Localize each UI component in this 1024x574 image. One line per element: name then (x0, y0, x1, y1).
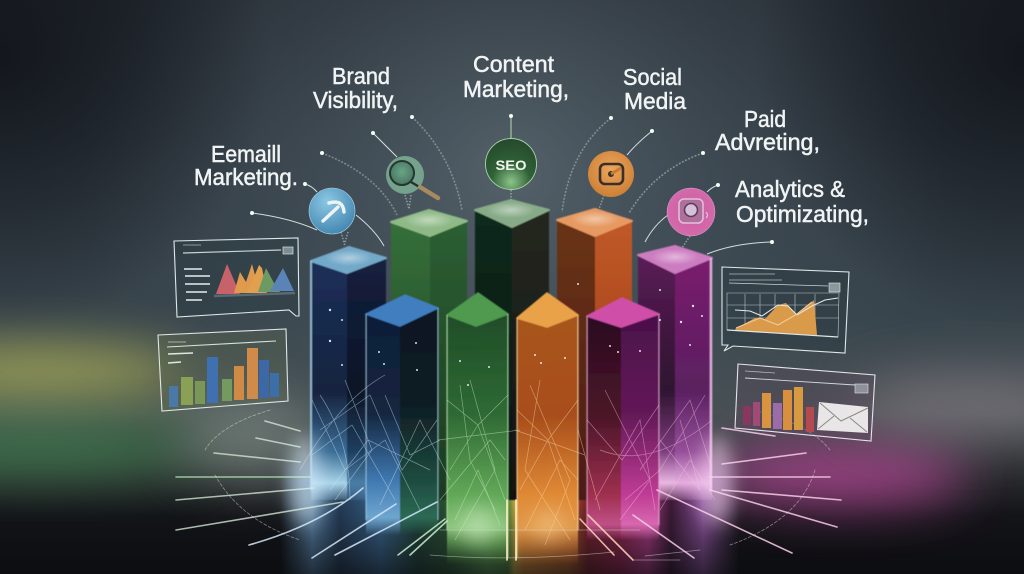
label: Brand Visibility: Brand (332, 63, 390, 89)
label: Content Marketing: Marketing, (463, 76, 569, 102)
glow at column bases (289, 435, 733, 543)
floor light lines (176, 410, 841, 560)
chart panel: area chart left (174, 238, 299, 317)
label: Paid Advertising: Paid (744, 106, 786, 132)
chart panel: bar chart left (158, 329, 288, 411)
label: Social Media (623, 64, 686, 114)
leader lines (250, 114, 774, 254)
icon: email arrow (309, 188, 355, 234)
label: Brand Visibility: Visibility, (313, 87, 398, 113)
icon: social media play (588, 151, 634, 197)
icon: SEO badge: SEO (496, 157, 527, 173)
icon: camera (667, 188, 715, 236)
label: Analytics and Optimizing: Optimizating, (736, 201, 869, 227)
label: Analytics and Optimizing (735, 176, 869, 227)
label: Email Marketing: Eemaill (211, 141, 281, 167)
label: Content Marketing: Content (473, 51, 555, 77)
column: back dark green (475, 200, 549, 500)
column: back blue (311, 247, 386, 500)
column: front orange (517, 293, 578, 565)
chart panel: line and area chart right (722, 267, 849, 353)
column: front green (447, 293, 508, 565)
label: Social Media: Media (624, 88, 686, 114)
icon: magnifier (386, 156, 438, 198)
label: Paid Advertising: Advreting, (715, 129, 820, 155)
column: back orange (557, 209, 632, 500)
glowing network web (300, 375, 715, 545)
column: back purple (638, 246, 712, 500)
label: Social Media: Social (623, 64, 682, 90)
column: front magenta (587, 298, 659, 540)
icon: envelope (817, 402, 868, 433)
floor colour reflections (280, 450, 740, 574)
label: Email Marketing (194, 141, 298, 190)
column: front blue (366, 295, 438, 535)
label: Brand Visibility (313, 63, 398, 113)
column: back green (391, 210, 467, 500)
particles (329, 283, 703, 386)
icon: SEO badge (486, 138, 536, 190)
chart panel: bars and envelope right (735, 364, 875, 441)
label: Email Marketing: Marketing. (194, 164, 298, 190)
label: Analytics and Optimizing: Analytics & (735, 176, 845, 202)
label: Paid Advertising (715, 106, 820, 155)
label: Content Marketing (463, 51, 569, 102)
